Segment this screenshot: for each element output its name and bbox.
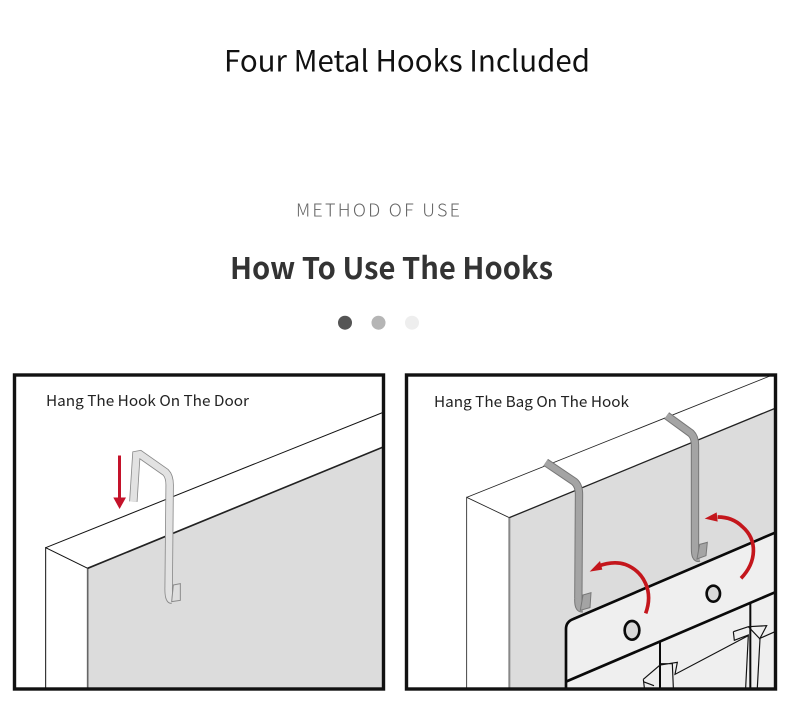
icon: hook xyxy=(133,454,180,602)
icon: hooks xyxy=(546,416,707,610)
pagination dots xyxy=(338,316,419,330)
arrows: red curved xyxy=(590,512,753,613)
step label: Hang The Hook On The Door xyxy=(46,390,249,411)
title: Four Metal Hooks Included xyxy=(224,38,590,80)
arrow: down xyxy=(113,456,126,509)
eyebrow: method of use: METHOD OF USE xyxy=(296,196,460,222)
panel: hang the bag on the hook xyxy=(406,375,776,689)
door illustration xyxy=(46,413,382,688)
panel frame xyxy=(14,375,384,689)
heading: How To Use The Hooks xyxy=(230,244,553,288)
bag xyxy=(566,533,775,688)
step label: Hang The Bag On The Hook xyxy=(434,391,630,412)
panel frame xyxy=(406,375,776,689)
panel: hang the hook on the door xyxy=(14,375,384,689)
door illustration xyxy=(467,376,775,688)
